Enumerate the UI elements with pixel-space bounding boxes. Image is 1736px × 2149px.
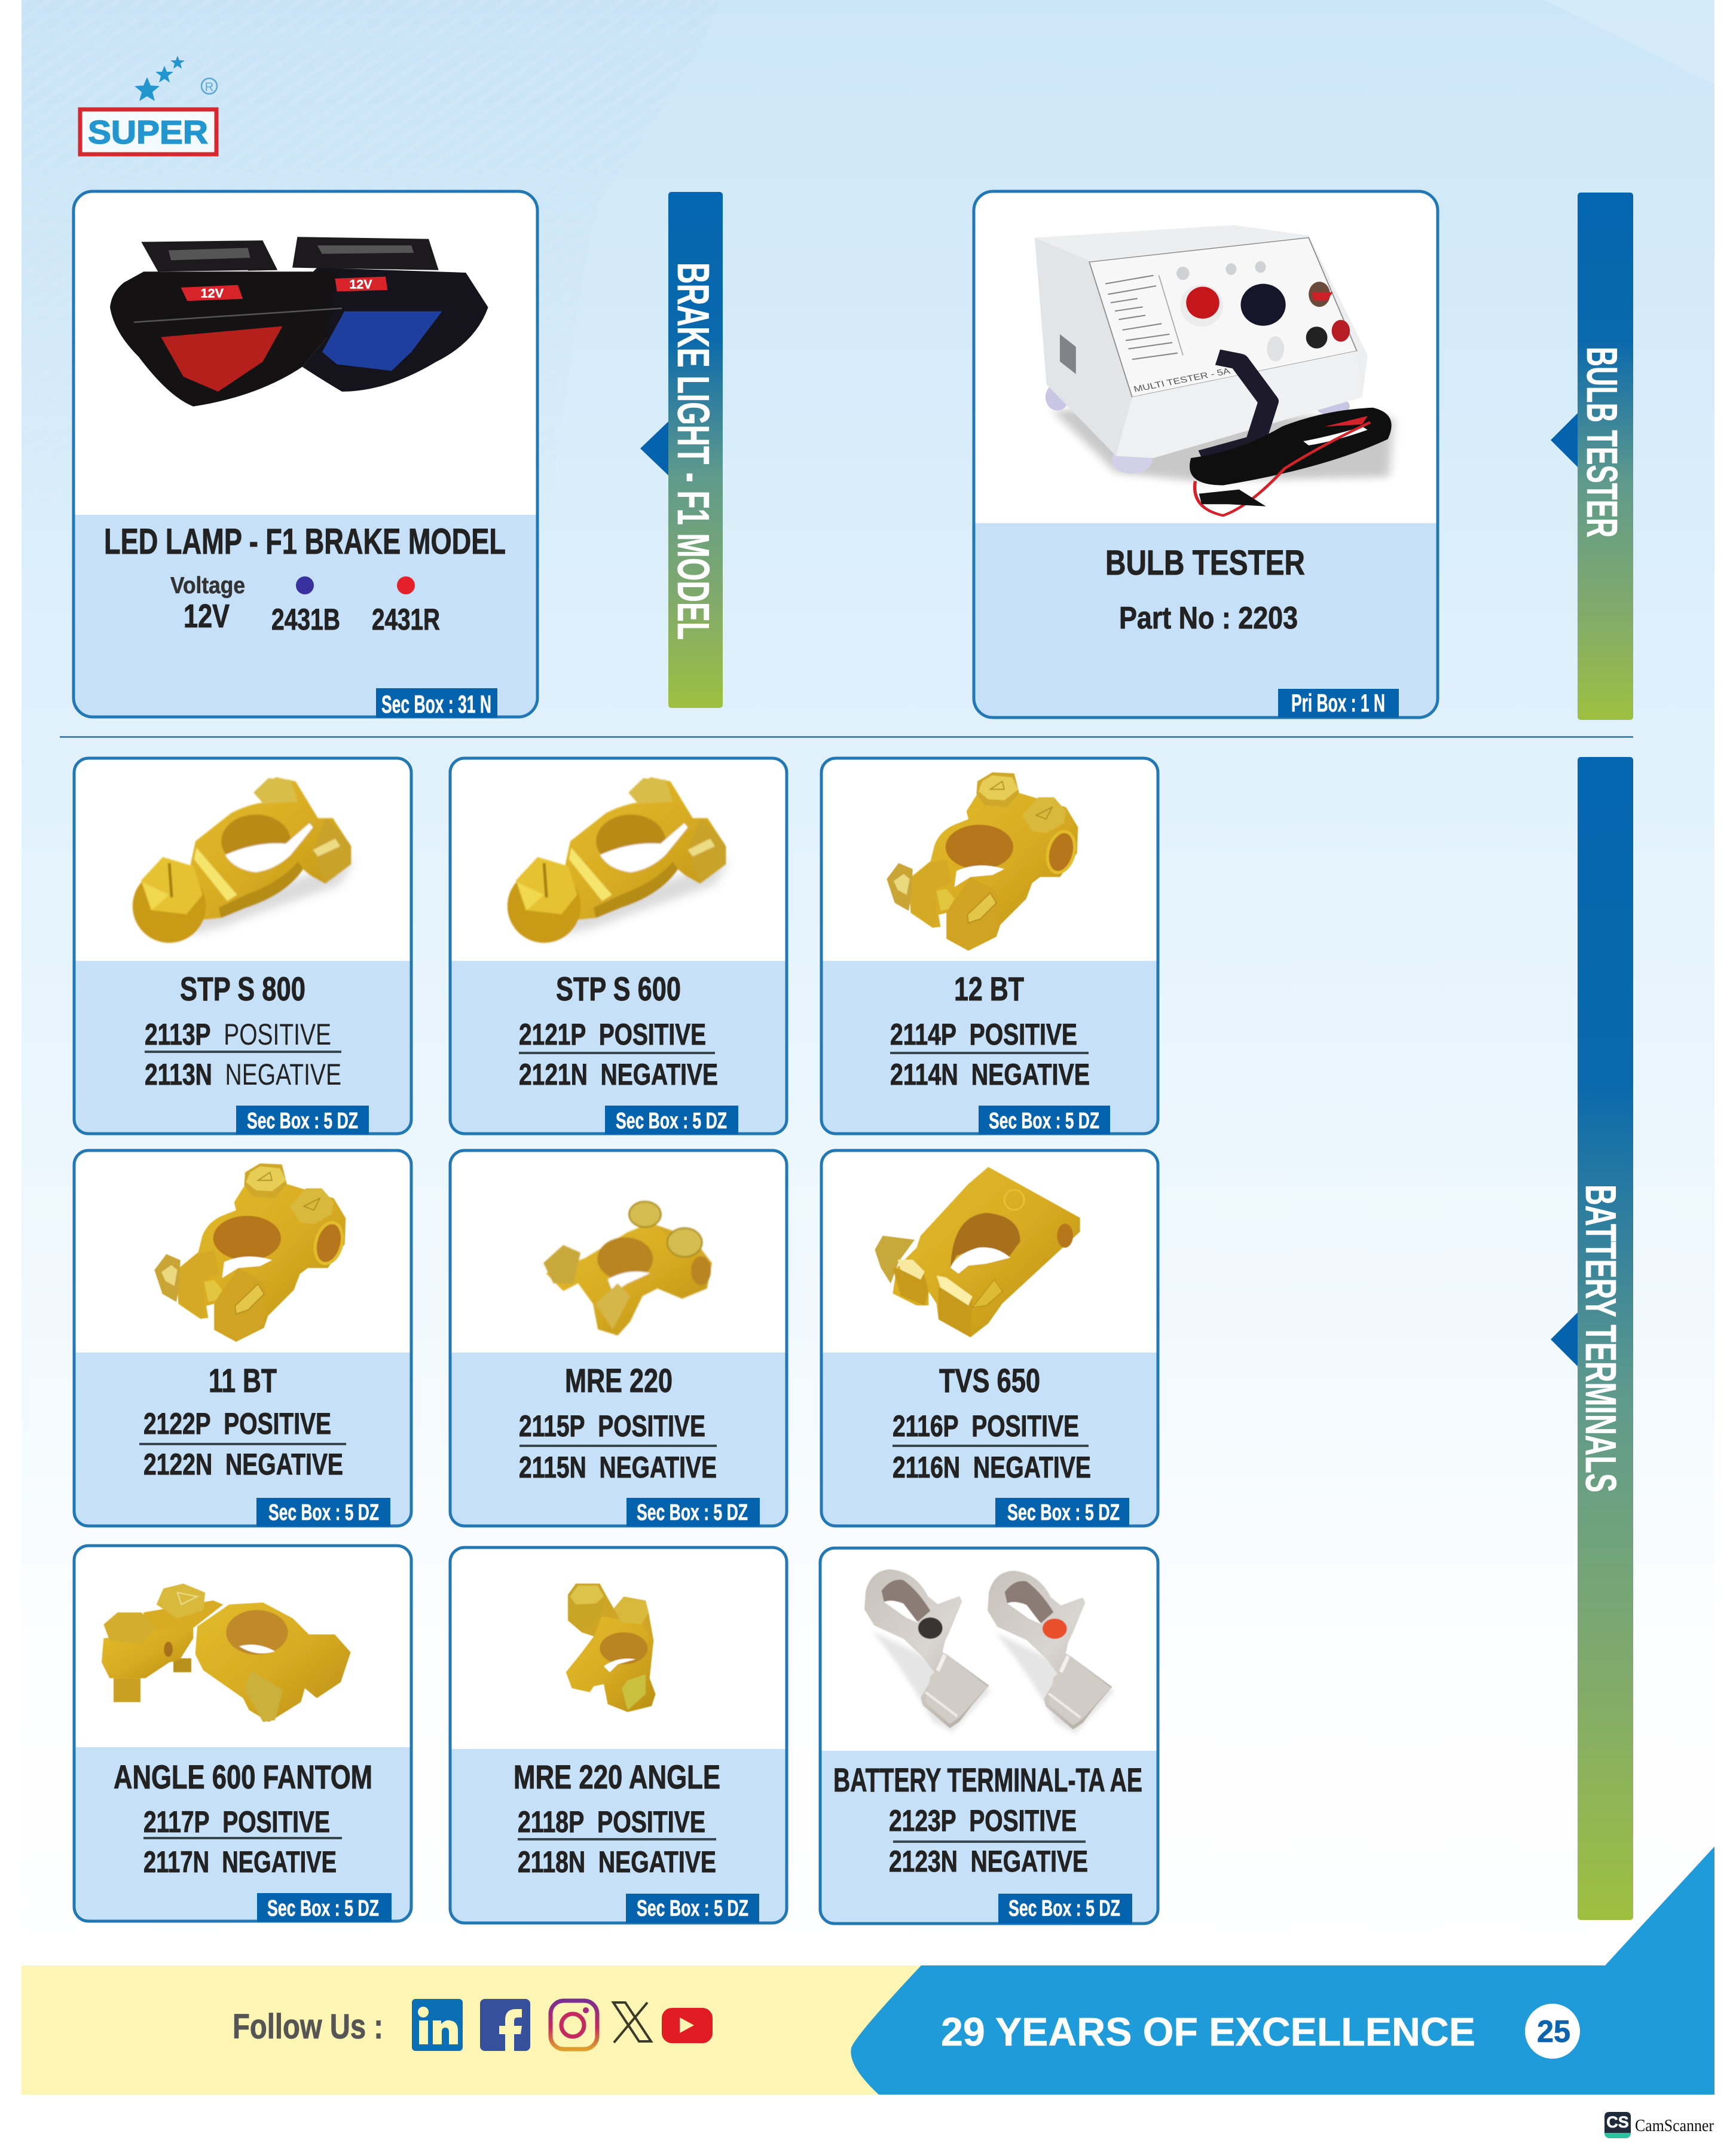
product photo: brake lamps: 12V <box>349 276 372 291</box>
part numbers <box>519 1409 717 1484</box>
panel: 12 BT <box>821 758 1158 1134</box>
voltage label: Voltage <box>170 573 245 599</box>
part number red: 2431R <box>372 603 440 636</box>
part numbers <box>893 1409 1091 1484</box>
part numbers: 2123P POSITIVE <box>889 1804 1077 1837</box>
badge: Sec Box : 5 DZ <box>616 1109 727 1134</box>
badge: Sec Box : 5 DZ <box>989 1109 1099 1134</box>
product photo: brake lamps <box>110 237 488 407</box>
part number: Part No : 2203 <box>1119 601 1298 636</box>
product photo: bulb tester device <box>1035 225 1394 515</box>
icon: LinkedIn <box>412 1999 463 2051</box>
product photo: 11 BT terminal <box>154 1164 347 1342</box>
section tab: battery terminals: BATTERY TERMINALS <box>1576 1185 1624 1492</box>
part numbers: 2116N NEGATIVE <box>893 1451 1091 1484</box>
icon: Facebook <box>480 1999 530 2051</box>
part numbers: 2116P POSITIVE <box>893 1409 1079 1443</box>
badge <box>605 1106 738 1134</box>
part numbers: 2114P POSITIVE <box>890 1018 1077 1051</box>
panel: MRE 220 Angle <box>450 1547 787 1923</box>
badge: Pri Box 1 N <box>1278 689 1399 718</box>
badge <box>979 1106 1110 1134</box>
footer band <box>22 1846 1714 2095</box>
heading: TVS 650 <box>939 1362 1040 1399</box>
watermark: CamScanner: CS <box>1606 2113 1629 2131</box>
follow us label: Follow Us : <box>233 2007 383 2046</box>
page number <box>1525 2004 1580 2059</box>
product photo: MRE 220 terminal <box>543 1202 712 1336</box>
product photo: MRE 220 Angle terminal <box>566 1583 656 1712</box>
heading: BATTERY TERMINAL-TA AE <box>833 1761 1142 1799</box>
panel: MRE 220 <box>450 1150 787 1527</box>
heading: STP S 800 <box>180 970 305 1008</box>
icon: Instagram <box>551 2001 597 2049</box>
logo: Super: SUPER <box>88 114 208 151</box>
badge <box>998 1894 1132 1924</box>
panel: TVS 650 <box>821 1150 1158 1527</box>
logo: Super <box>80 56 217 154</box>
heading: 11 BT <box>209 1362 277 1399</box>
part numbers: 2115P POSITIVE <box>519 1409 705 1443</box>
section tab: battery terminals <box>1551 757 1633 1920</box>
voltage value: 12V <box>184 597 230 634</box>
part numbers: 2123N NEGATIVE <box>889 1845 1088 1878</box>
part numbers: 2115N NEGATIVE <box>519 1451 717 1484</box>
product photo: Angle 600 terminal <box>102 1583 351 1722</box>
badge: Sec Box : 5 DZ <box>268 1500 379 1525</box>
colour dot: blue <box>296 576 314 594</box>
page background <box>22 0 1714 1489</box>
part numbers: 2121N NEGATIVE <box>519 1058 718 1091</box>
part numbers: 2113P POSITIVE <box>145 1018 331 1051</box>
section tab: brake light <box>640 192 723 708</box>
part numbers <box>890 1018 1090 1091</box>
part numbers <box>139 1407 346 1481</box>
part numbers: 2122N NEGATIVE <box>143 1448 343 1481</box>
heading: MRE 220 <box>565 1362 673 1399</box>
badge <box>236 1106 369 1134</box>
badge: Sec Box 31 N <box>376 688 497 718</box>
part numbers <box>143 1805 342 1879</box>
section tab: bulb tester <box>1551 193 1633 720</box>
badge <box>626 1894 759 1923</box>
heading: BULB TESTER <box>1105 544 1305 582</box>
part numbers: 2122P POSITIVE <box>143 1407 331 1440</box>
product photo: bulb tester device: MULTI TESTER - 5A <box>1133 366 1231 394</box>
product photo: STP S 600 terminal <box>508 777 730 943</box>
colour dot: red <box>397 576 415 594</box>
part numbers: 2117P POSITIVE <box>143 1805 330 1839</box>
part numbers: 2114N NEGATIVE <box>890 1058 1090 1091</box>
product photo: brake lamps: 12V <box>201 285 224 300</box>
part numbers <box>145 1018 341 1091</box>
part numbers <box>889 1804 1088 1878</box>
icon: YouTube <box>662 2008 713 2043</box>
section tab: brake light: BRAKE LIGHT - F1 MODEL <box>668 262 719 640</box>
badge <box>995 1498 1129 1527</box>
part numbers: 2113N NEGATIVE <box>145 1058 341 1091</box>
badge <box>626 1498 760 1527</box>
watermark: CamScanner: CamScanner <box>1635 2116 1714 2135</box>
panel: LED lamp F1 brake model <box>74 191 537 718</box>
watermark: CamScanner <box>1604 2112 1714 2138</box>
heading: 12 BT <box>954 970 1024 1008</box>
badge: Sec Box : 5 DZ <box>637 1896 748 1921</box>
panel: Battery Terminal TA AE <box>820 1548 1158 1924</box>
logo: Super: R <box>205 81 213 94</box>
badge: Sec Box : 5 DZ <box>1008 1896 1120 1921</box>
badge: Sec Box : 5 DZ <box>267 1896 379 1921</box>
product photo: STP S 800 terminal <box>133 777 355 943</box>
panel: bulb tester <box>974 191 1438 718</box>
heading: LED LAMP - F1 BRAKE MODEL <box>104 521 506 561</box>
product photo: 12 BT terminal <box>887 773 1079 951</box>
part numbers <box>519 1018 718 1091</box>
badge <box>257 1893 392 1922</box>
product photo: TVS 650 terminal <box>875 1167 1080 1338</box>
panel: 11 BT <box>74 1150 411 1527</box>
badge: Sec Box 31 N: Sec Box : 31 N <box>381 690 491 718</box>
tagline: 29 YEARS OF EXCELLENCE <box>941 2010 1475 2055</box>
part numbers: 2118N NEGATIVE <box>518 1845 716 1879</box>
part number blue: 2431B <box>271 603 340 636</box>
part numbers: 2117N NEGATIVE <box>143 1845 337 1879</box>
panel: STP S 800 <box>74 758 411 1134</box>
page number: 25 <box>1537 2014 1570 2049</box>
badge <box>256 1498 390 1527</box>
badge: Sec Box : 5 DZ <box>247 1109 358 1134</box>
badge: Pri Box 1 N: Pri Box : 1 N <box>1291 689 1385 717</box>
part numbers: 2121P POSITIVE <box>519 1018 706 1051</box>
badge: Sec Box : 5 DZ <box>637 1500 748 1525</box>
heading: ANGLE 600 FANTOM <box>114 1758 372 1796</box>
part numbers: 2118P POSITIVE <box>518 1805 705 1839</box>
heading: STP S 600 <box>556 970 681 1008</box>
product photo: silver terminals pair <box>864 1570 1114 1733</box>
icon: X <box>613 2003 651 2043</box>
section tab: bulb tester: BULB TESTER <box>1578 347 1625 538</box>
panel: STP S 600 <box>450 758 787 1134</box>
panel: Angle 600 Fantom <box>74 1546 411 1922</box>
part numbers <box>518 1805 716 1879</box>
blue ribbon <box>851 1846 1714 2095</box>
badge: Sec Box : 5 DZ <box>1007 1500 1120 1525</box>
heading: MRE 220 ANGLE <box>514 1758 720 1796</box>
